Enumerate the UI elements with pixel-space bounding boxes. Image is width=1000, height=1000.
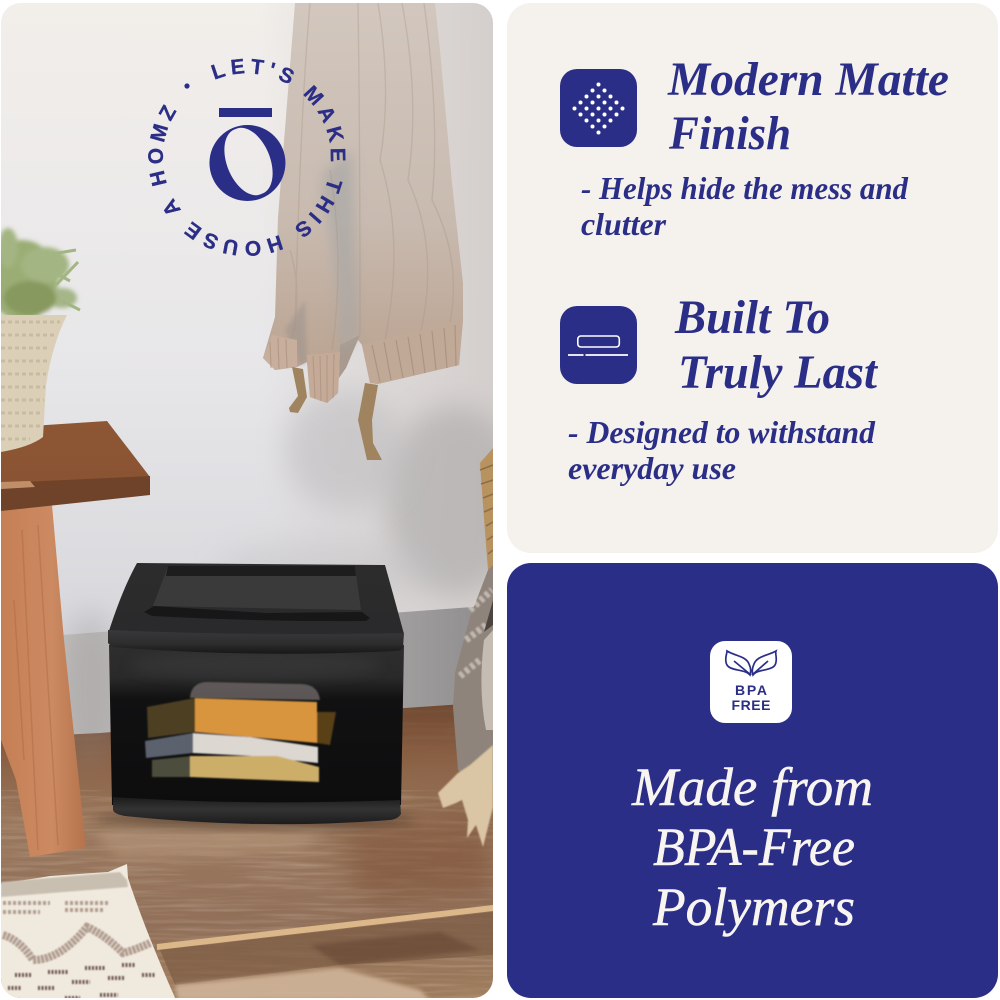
icon: BPA free badge: [710, 641, 792, 723]
icon: durable shelf: [560, 306, 637, 384]
drawer base: [113, 797, 401, 824]
wood floor: [1, 700, 493, 1000]
heading: modern matte finish: Modern Matte: [667, 53, 949, 106]
lid recess: [153, 566, 361, 610]
icon: BPA free badge: FREE: [732, 697, 770, 713]
text: helps hide the mess: [581, 170, 909, 242]
wall background: [1, 3, 493, 635]
heading: made from BPA-free polymers: BPA-Free: [653, 817, 855, 877]
rug: [1, 864, 176, 1000]
heading: modern matte finish: Finish: [668, 107, 791, 160]
gap fabric: [339, 335, 360, 378]
lid handle: [144, 606, 370, 621]
sweater: [263, 3, 463, 403]
panel: features: [507, 3, 998, 553]
text: designed to withstand: [568, 414, 876, 486]
basket: [1, 315, 67, 452]
text: designed to withstand: - Designed to withstand: [568, 414, 876, 450]
icon: dot diamond: [560, 69, 637, 147]
shadow on wall behind drawer: [64, 610, 111, 766]
panel: lifestyle photo: [1, 3, 493, 998]
window notch: [190, 682, 320, 700]
icon: BPA free badge: BPA: [735, 682, 767, 698]
ribbed cuffs: [263, 320, 463, 403]
drawer: [96, 563, 416, 829]
bench: [1, 421, 150, 857]
circular text: LET'S MAKE THIS HOUSE A HOMZ: [148, 58, 346, 256]
front rim: [108, 630, 404, 654]
dot separator: [184, 83, 190, 89]
logo badge: [148, 58, 346, 256]
text: designed to withstand: everyday use: [568, 450, 736, 486]
text: helps hide the mess: clutter: [581, 206, 667, 242]
heading: made from BPA-free polymers: [631, 757, 873, 937]
fold shadow: [322, 150, 358, 352]
heading: built to truly last: [674, 291, 879, 399]
cable knit: [288, 3, 453, 350]
heading: built to truly last: Built To: [674, 291, 830, 344]
heading: built to truly last: Truly Last: [678, 346, 879, 399]
text: helps hide the mess: - Helps hide the mess and: [581, 170, 909, 206]
heading: modern matte finish: [667, 53, 949, 160]
right basket: [480, 448, 493, 572]
plant: [0, 228, 80, 320]
panel: BPA free: [507, 563, 998, 998]
blanket: [438, 565, 493, 847]
baseboard: [64, 606, 474, 734]
lid: [108, 563, 404, 634]
drawer shadow: [96, 811, 416, 829]
folded clothes: [145, 698, 336, 782]
logo mark: [209, 108, 285, 201]
heading: made from BPA-free polymers: Made from: [631, 757, 873, 817]
heading: made from BPA-free polymers: Polymers: [652, 877, 855, 937]
drawer body: [109, 645, 404, 805]
sweater tails: [289, 367, 382, 460]
